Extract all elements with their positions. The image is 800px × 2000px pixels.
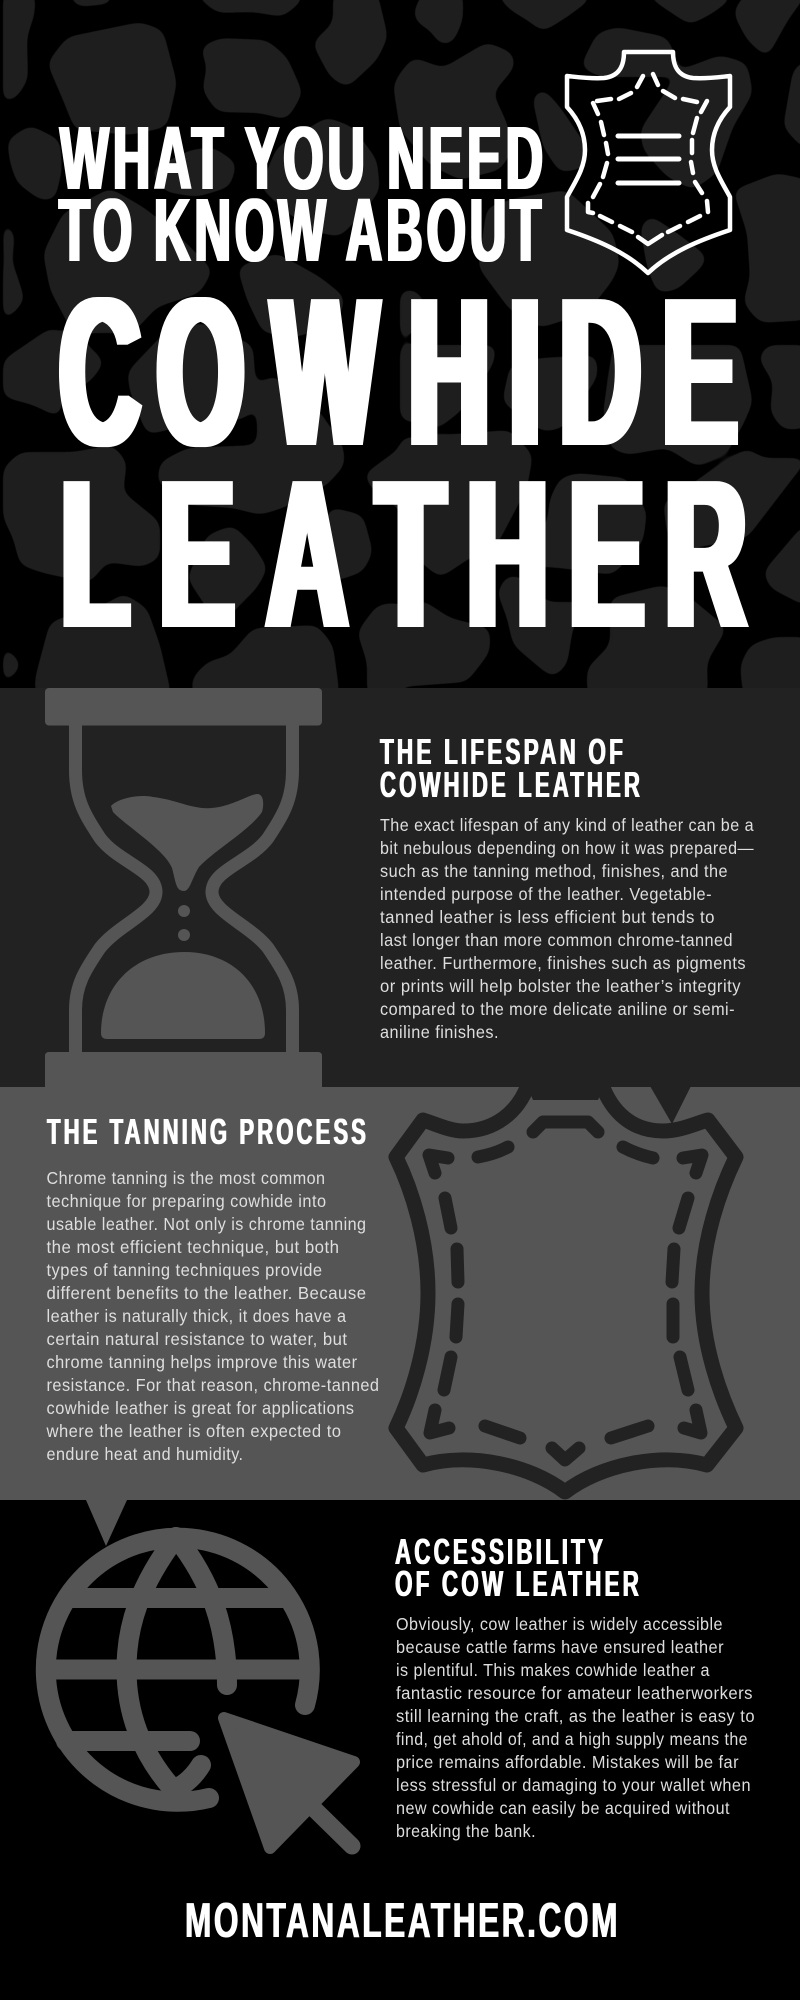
text: accessibility body [396, 1614, 755, 1841]
text: tanning body: leather is naturally thick, it does have a [46, 1306, 346, 1326]
text: accessibility body: because cattle farms have ensured leather [396, 1637, 724, 1657]
text: tanning body: types of tanning techniques provide [46, 1260, 322, 1280]
text: accessibility body: price remains affordable. Mistakes will be far [396, 1752, 739, 1772]
text: lifespan body: bit nebulous depending on how it was prepared— [380, 838, 754, 858]
text: tanning body: where the leather is often expected to [46, 1421, 341, 1441]
heading: the tanning process: THE TANNING PROCESS [47, 1111, 369, 1152]
panel: header with cowhide pattern [0, 0, 800, 697]
text: accessibility body: breaking the bank. [396, 1821, 536, 1841]
text: accessibility body: find, get ahold of, and a high supply means the [396, 1729, 748, 1749]
heading: accessibility of cow leather: OF COW LEATHER [395, 1563, 642, 1604]
panel: lifespan section [0, 688, 800, 1087]
text: tanning body: usable leather. Not only is chrome tanning [46, 1214, 366, 1234]
text: lifespan body: compared to the more delicate aniline or semi- [380, 999, 735, 1019]
text: lifespan body: leather. Furthermore, finishes such as pigments [380, 953, 746, 973]
text: lifespan body: last longer than more common chrome-tanned [380, 930, 733, 950]
heading: accessibility of cow leather: ACCESSIBILITY [395, 1531, 606, 1572]
text: tanning body: cowhide leather is great for applications [46, 1398, 354, 1418]
text: accessibility body: is plentiful. This makes cowhide leather a [396, 1660, 710, 1680]
text: lifespan body: The exact lifespan of any kind of leather can be a [380, 815, 754, 835]
text: lifespan body [380, 815, 754, 1042]
text: lifespan body: such as the tanning method, finishes, and the [380, 861, 728, 881]
text: tanning body: certain natural resistance to water, but [46, 1329, 348, 1349]
text: lifespan body: tanned leather is less efficient but tends to [380, 907, 715, 927]
panel: accessibility section [0, 1500, 800, 2000]
text: lifespan body: intended purpose of the leather. Vegetable- [380, 884, 712, 904]
heading: the lifespan of cowhide leather [380, 731, 643, 805]
text: accessibility body: Obviously, cow leather is widely accessible [396, 1614, 723, 1634]
text: tanning body [46, 1168, 379, 1464]
panel: tanning process section [0, 1085, 800, 1500]
text: tanning body: endure heat and humidity. [46, 1444, 244, 1464]
text: accessibility body: still learning the craft, as the leather is easy to [396, 1706, 755, 1726]
heading: accessibility of cow leather [395, 1531, 642, 1604]
text: tanning body: technique for preparing cowhide into [46, 1191, 326, 1211]
text: tanning body: resistance. For that reason, chrome-tanned [46, 1375, 380, 1395]
text: accessibility body: new cowhide can easily be acquired without [396, 1798, 730, 1818]
icon: hourglass [45, 688, 322, 1087]
text: tanning body: different benefits to the leather. Because [46, 1283, 366, 1303]
icon: white leather hide with stitches [567, 52, 730, 273]
text: accessibility body: less stressful or damaging to your wallet when [396, 1775, 751, 1795]
text: tanning body: Chrome tanning is the most common [46, 1168, 326, 1188]
icon: globe with cursor [40, 1500, 354, 1848]
title: cowhide: COWHIDE [59, 253, 737, 490]
title: leather: LEATHER [61, 435, 746, 672]
text: tanning body: chrome tanning helps improve this water [46, 1352, 358, 1372]
heading: the lifespan of cowhide leather: COWHIDE LEATHER [380, 764, 643, 805]
title: what you need to know about [59, 109, 547, 281]
text: accessibility body: fantastic resource for amateur leatherworkers [396, 1683, 753, 1703]
icon: dark leather hide with stitches [396, 1085, 736, 1492]
text: tanning body: the most efficient technique, but both [46, 1237, 340, 1257]
heading: the lifespan of cowhide leather: THE LIFESPAN OF [380, 731, 626, 772]
text: lifespan body: or prints will help bolster the leather’s integrity [380, 976, 741, 996]
text: lifespan body: aniline finishes. [380, 1022, 499, 1042]
